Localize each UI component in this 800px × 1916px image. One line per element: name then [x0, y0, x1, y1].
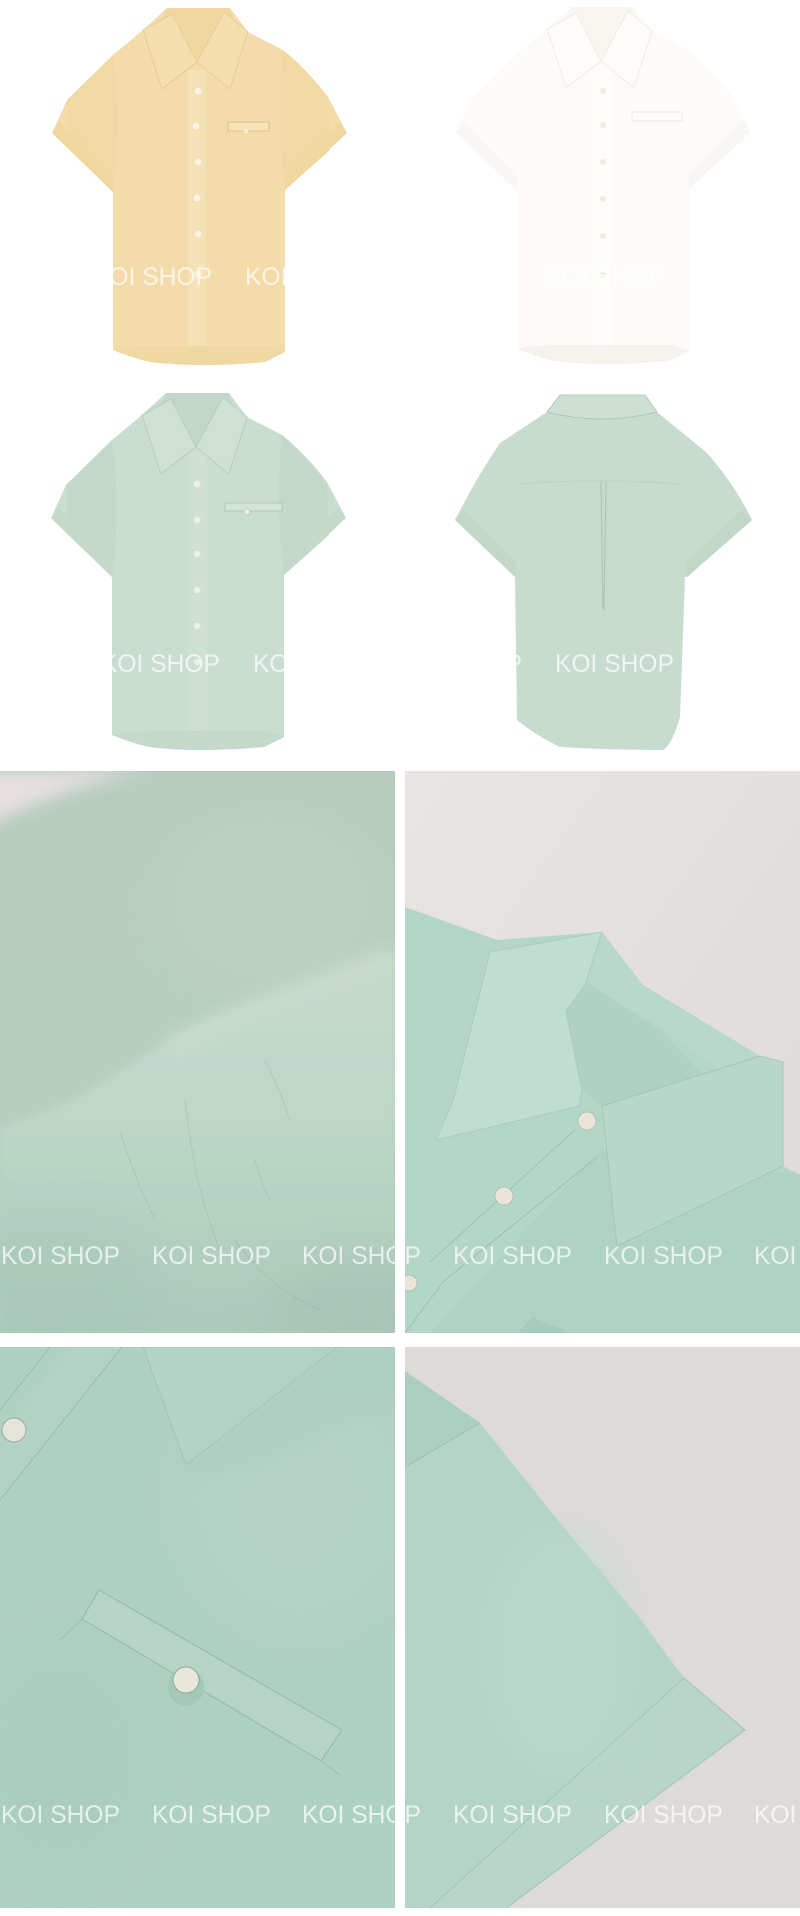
- product photo: white shirt front: [456, 7, 751, 364]
- watermark row: second detail row: KOI SHOP: [1, 1802, 120, 1829]
- buttons: [194, 481, 200, 665]
- collar-side button: [2, 1418, 26, 1442]
- watermark row: product photos bottom: [101, 651, 674, 678]
- watermark row: second detail row: [1, 1802, 800, 1829]
- chest pocket: [632, 112, 682, 121]
- right collar flap: [602, 1056, 783, 1246]
- watermark row: product photos top: KOI SHOP: [245, 264, 364, 291]
- collar buttons: [401, 1112, 596, 1291]
- watermark row: product photos top: KOI SHOP: [546, 264, 665, 291]
- fabric slubs: [120, 1060, 320, 1310]
- placket: [405, 1130, 597, 1333]
- watermark row: product photos top: KOI SHOP: [93, 264, 212, 291]
- product photo: green shirt back: [455, 395, 752, 750]
- watermark row: second detail row: KOI SHOP: [152, 1802, 271, 1829]
- cuff: [429, 1678, 745, 1909]
- watermark row: product photos bottom: KOI SHOP: [253, 651, 372, 678]
- watermark row: second detail row: KOI SHOP: [302, 1802, 421, 1829]
- chest pocket: [225, 503, 282, 515]
- detail panel: pocket close-up: [0, 1347, 410, 1908]
- detail panel: sleeve close-up: [405, 1347, 800, 1909]
- watermark row: first detail row: KOI SHOP: [453, 1243, 572, 1270]
- pocket edge: [518, 1317, 570, 1333]
- buttons: [600, 88, 606, 278]
- watermark row: product photos top: KOI SHOP: [397, 264, 516, 291]
- watermark row: product photos bottom: KOI SHOP: [403, 651, 522, 678]
- watermark row: product photos bottom: KOI SHOP: [101, 651, 220, 678]
- watermark row: second detail row: KOI SHOP: [453, 1802, 572, 1829]
- watermark row: first detail row: KOI SHOP: [302, 1243, 421, 1270]
- watermark row: product photos bottom: KOI SHOP: [555, 651, 674, 678]
- watermark row: first detail row: KOI SHOP: [604, 1243, 723, 1270]
- placket: [0, 1347, 122, 1500]
- product photo: green shirt front: [51, 393, 346, 750]
- detail panel: fabric close-up: [0, 771, 395, 1333]
- collar stand: [604, 934, 759, 1056]
- pocket welt: [82, 1590, 342, 1761]
- watermark row: product photos top: [93, 264, 665, 291]
- watermark row: first detail row: [1, 1243, 800, 1270]
- left collar flap: [436, 932, 602, 1140]
- watermark row: first detail row: KOI SHOP: [152, 1243, 271, 1270]
- collar tip: [143, 1347, 337, 1465]
- armhole seam: [405, 1371, 479, 1422]
- chest pocket: [228, 122, 269, 133]
- detail panel: collar close-up: [401, 771, 800, 1333]
- watermark row: first detail row: KOI SHOP: [1, 1243, 120, 1270]
- product photo: yellow shirt front: [52, 8, 347, 365]
- watermark row: second detail row: KOI SHOP: [604, 1802, 723, 1829]
- pocket button: [168, 1667, 204, 1706]
- inner neck: [586, 982, 616, 1002]
- buttons: [193, 88, 201, 277]
